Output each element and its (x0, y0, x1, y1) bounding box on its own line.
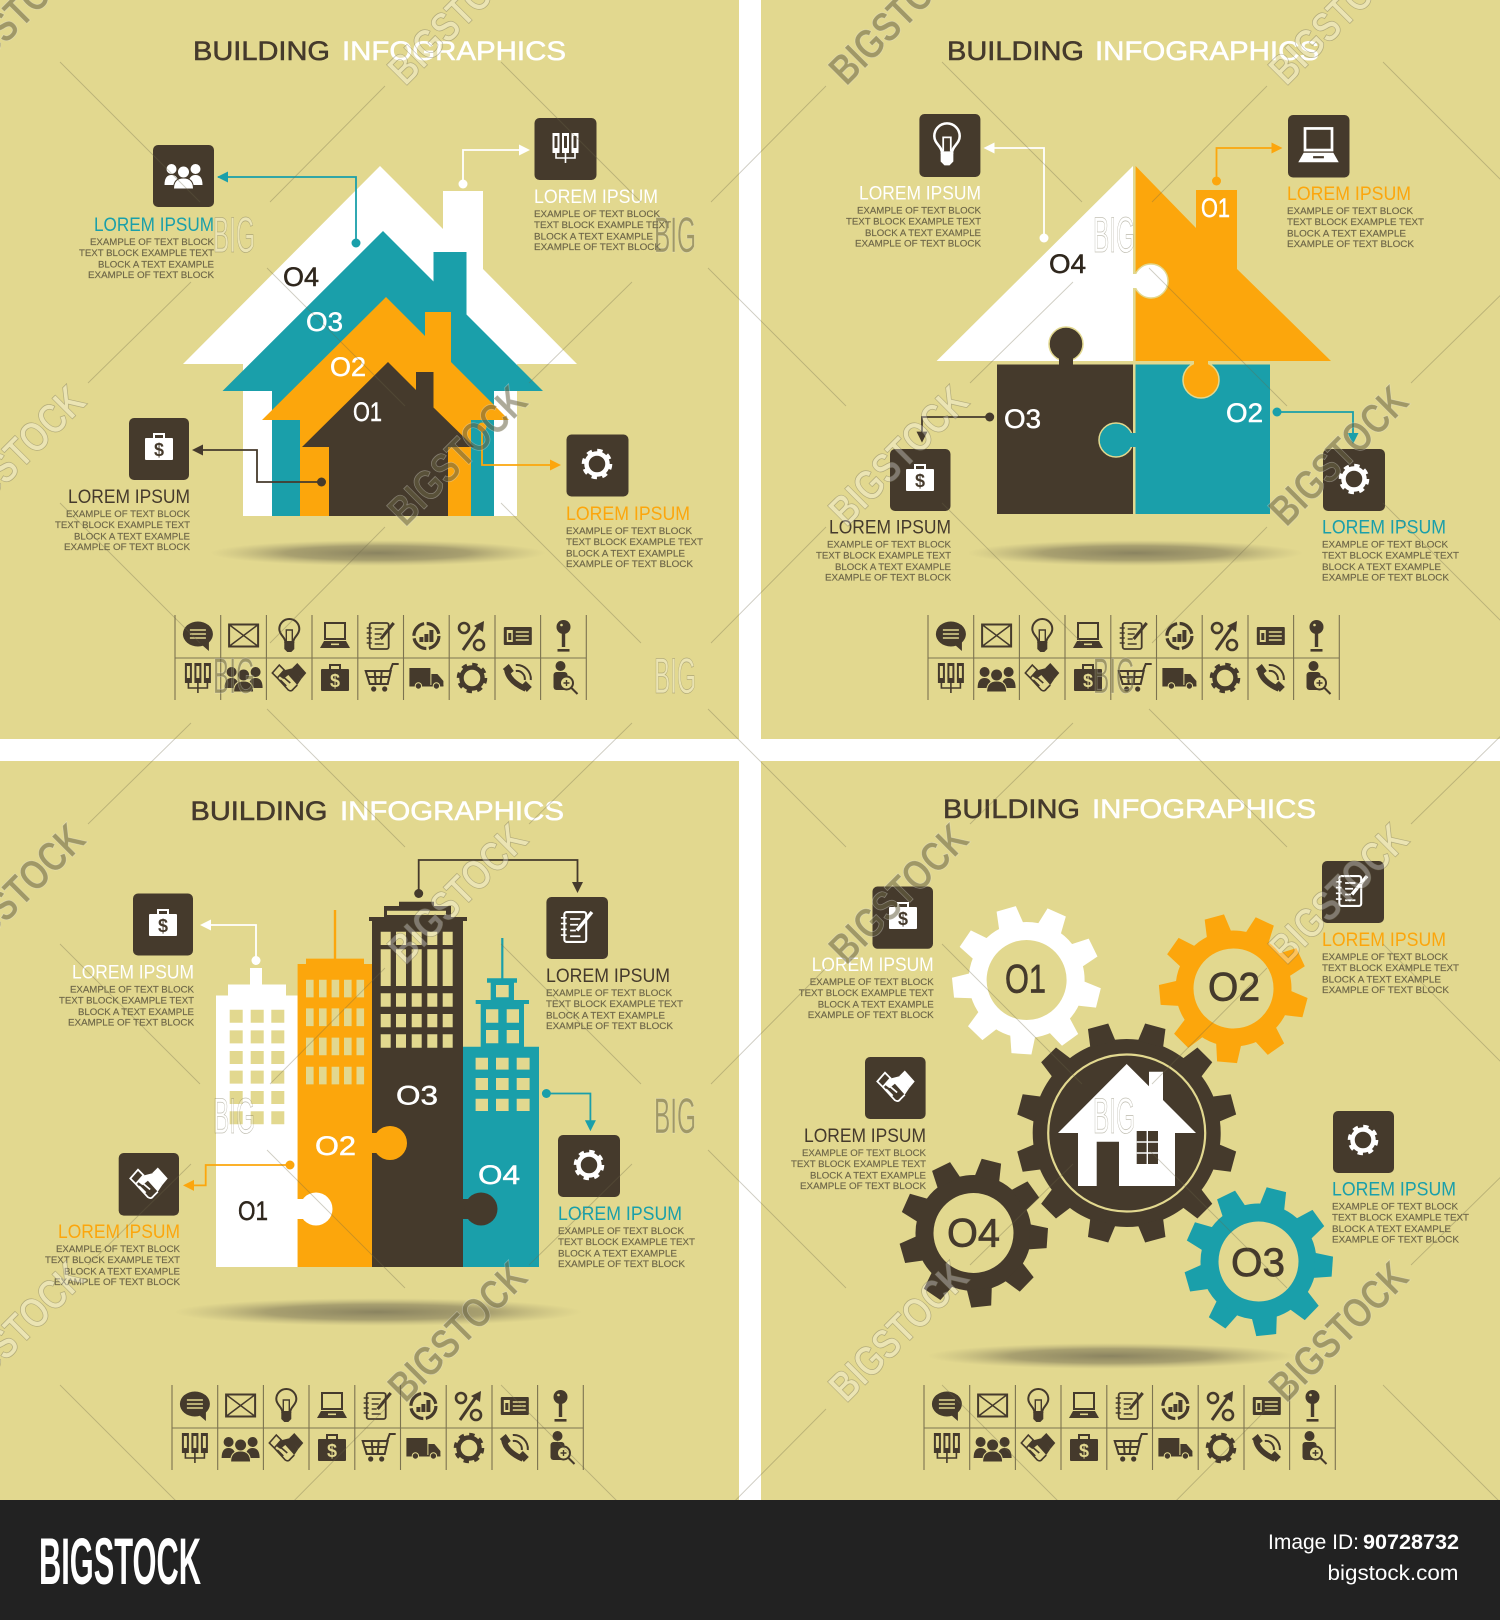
icon strip (172, 1385, 583, 1470)
watermark: BIGSTOCK diagonal stamps: BIGSTOCK (820, 377, 977, 534)
callout: gear: BLOCK A TEXT EXAMPLE (1332, 1224, 1451, 1235)
callout: notepad: EXAMPLE OF TEXT BLOCK (546, 1021, 674, 1032)
icon strip (924, 1385, 1335, 1470)
icon: briefcase (321, 665, 349, 691)
icon: pin (1310, 620, 1324, 652)
image id: 90728732 (1363, 1531, 1459, 1554)
icon: notepad (1120, 623, 1147, 649)
callout: gear (558, 1135, 695, 1270)
icon: gear (1212, 664, 1238, 692)
icon: id card (504, 627, 532, 645)
shadow (967, 540, 1303, 566)
callout: bulb (846, 114, 982, 250)
icon: gear (458, 664, 486, 692)
callout: briefcase: TEXT BLOCK EXAMPLE TEXT (816, 550, 951, 562)
callout: briefcase (55, 418, 191, 553)
watermark: BIGSTOCK diagonal stamps: BIGSTOCK (820, 1253, 977, 1410)
callout: gear (1322, 449, 1459, 584)
numbers: O4 (1049, 249, 1086, 279)
connector: brown (916, 412, 994, 443)
watermark: BIG stamps: BIG (654, 648, 696, 704)
numbers: O2 (315, 1131, 356, 1161)
white house layer (183, 166, 577, 516)
callout: gear: LOREM IPSUM (566, 504, 690, 525)
icon: handshake (269, 1433, 303, 1461)
icon: chart dial (1163, 1394, 1188, 1418)
connector: brown (414, 860, 583, 898)
callout: binders: BLOCK A TEXT EXAMPLE (534, 232, 653, 242)
callout: team: TEXT BLOCK EXAMPLE TEXT (79, 248, 214, 259)
gear: orange 02: O2 (1208, 966, 1260, 1010)
title (943, 794, 1316, 824)
icon: laptop (317, 1393, 347, 1418)
callout: team: EXAMPLE OF TEXT BLOCK (90, 237, 215, 248)
icon: percent (1212, 621, 1237, 650)
callout: binders (534, 118, 671, 253)
callout: briefcase: EXAMPLE OF TEXT BLOCK (827, 540, 952, 550)
callout: briefcase: LOREM IPSUM (68, 487, 190, 508)
watermark: BIG stamps: BIG (213, 207, 255, 263)
connector: teal (542, 1089, 596, 1131)
callout: team: LOREM IPSUM (94, 215, 214, 236)
callout: briefcase: LOREM IPSUM (72, 963, 194, 984)
icon: laptop (320, 623, 350, 648)
callout: laptop: BLOCK A TEXT EXAMPLE (1287, 228, 1406, 240)
callout: notepad: BLOCK A TEXT EXAMPLE (546, 1010, 665, 1022)
icon: truck (1162, 668, 1196, 689)
callout: handshake (45, 1153, 181, 1288)
panel: puzzle house (761, 0, 1500, 739)
watermark: BIGSTOCK diagonal stamps: BIGSTOCK (379, 815, 536, 972)
connector: brown (192, 444, 326, 486)
callout: handshake: TEXT BLOCK EXAMPLE TEXT (791, 1159, 926, 1170)
icon: percent (459, 621, 484, 650)
icon: team (974, 1437, 1012, 1462)
callout: handshake: EXAMPLE OF TEXT BLOCK (54, 1277, 181, 1288)
panel: gears (761, 761, 1500, 1500)
watermark: BIGSTOCK diagonal stamps: BIGSTOCK (1260, 1253, 1417, 1410)
icon: light bulb (276, 1389, 296, 1422)
callout: gear: BLOCK A TEXT EXAMPLE (558, 1248, 677, 1260)
icon: chart dial (414, 624, 439, 648)
icon: pin (556, 620, 570, 652)
shadow (927, 1343, 1295, 1369)
puzzle tab: white (1132, 264, 1168, 298)
icon: person search (550, 1431, 574, 1464)
icon: laptop (1069, 1393, 1099, 1418)
building: white (216, 968, 298, 1267)
title: INFOGRAPHICS (1095, 36, 1319, 66)
icon: notepad (367, 623, 394, 649)
gear: central with house (991, 998, 1262, 1268)
icon: briefcase (1070, 1435, 1098, 1461)
numbers: O3 (396, 1080, 438, 1110)
icon: id card (1257, 627, 1285, 645)
icon: chart dial (411, 1394, 436, 1418)
callout: laptop: EXAMPLE OF TEXT BLOCK (1287, 206, 1414, 217)
callout: handshake: LOREM IPSUM (804, 1126, 926, 1147)
icon strip (175, 615, 586, 700)
connector: white (458, 144, 530, 188)
callout: notepad: EXAMPLE OF TEXT BLOCK (1322, 952, 1449, 963)
icon: briefcase (1074, 665, 1102, 691)
panel: city skyline (0, 761, 739, 1500)
icon: truck (409, 668, 443, 689)
gear: white 01 (934, 888, 1119, 1072)
icon: binders (182, 1433, 208, 1463)
numbers (1004, 193, 1263, 434)
gear: teal 03 (1168, 1172, 1349, 1351)
connector: orange (1212, 142, 1282, 186)
panel: layered house (0, 0, 739, 739)
callout: laptop: LOREM IPSUM (1287, 184, 1411, 205)
callout: notepad: LOREM IPSUM (1322, 930, 1446, 951)
connector: white (200, 920, 260, 965)
icon: light bulb (1028, 1389, 1048, 1422)
callout: briefcase: LOREM IPSUM (812, 955, 934, 976)
callout: gear: TEXT BLOCK EXAMPLE TEXT (566, 537, 703, 548)
connector: white (984, 142, 1048, 242)
icon: speech bubble (932, 1392, 962, 1421)
callout: gear: TEXT BLOCK EXAMPLE TEXT (1322, 550, 1459, 562)
icon: light bulb (279, 619, 299, 652)
icon: pin (1306, 1390, 1320, 1422)
icon: phone (503, 664, 532, 692)
callout: gear: EXAMPLE OF TEXT BLOCK (1322, 572, 1450, 584)
callout: gear: EXAMPLE OF TEXT BLOCK (1332, 1202, 1459, 1213)
title: INFOGRAPHICS (340, 796, 564, 826)
callout: handshake: BLOCK A TEXT EXAMPLE (64, 1266, 180, 1278)
numbers: O1 (1201, 193, 1230, 223)
icon: briefcase (318, 1435, 346, 1461)
icon: percent (1208, 1391, 1233, 1420)
callout: gear: EXAMPLE OF TEXT BLOCK (1332, 1235, 1460, 1246)
icon: speech bubble (936, 622, 966, 651)
callout: bulb: EXAMPLE OF TEXT BLOCK (855, 238, 982, 250)
numbers: O3 (306, 307, 343, 337)
icon: phone (1252, 1434, 1281, 1462)
watermark: BIGSTOCK diagonal stamps: BIGSTOCK (379, 1253, 536, 1410)
numbers: O1 (238, 1196, 268, 1226)
shadow (174, 1298, 582, 1326)
title: BUILDING (193, 36, 330, 66)
puzzle tab: white (296, 1192, 332, 1226)
icon: envelope (982, 624, 1011, 646)
title (947, 36, 1319, 66)
icon: team (225, 667, 263, 692)
callout: gear: LOREM IPSUM (558, 1204, 682, 1225)
title: BUILDING (947, 36, 1084, 66)
puzzle piece: teal wall (1099, 364, 1270, 514)
callout: briefcase (59, 894, 195, 1029)
icon: truck (406, 1438, 440, 1459)
watermark: BIGSTOCK diagonal stamps: BIGSTOCK (1260, 815, 1417, 972)
callout: bulb: EXAMPLE OF TEXT BLOCK (857, 206, 982, 216)
callout: briefcase: EXAMPLE OF TEXT BLOCK (825, 572, 952, 584)
callout: briefcase: EXAMPLE OF TEXT BLOCK (808, 1010, 934, 1021)
gear: orange 02 (1142, 898, 1325, 1079)
orange house layer (262, 297, 509, 516)
icon: handshake (272, 663, 306, 691)
footer bar (0, 1500, 1500, 1620)
icon: pin (554, 1390, 568, 1422)
icon: handshake (1021, 1433, 1055, 1461)
connector: teal (217, 172, 360, 248)
icon: binders (934, 1433, 960, 1463)
callout: notepad (546, 897, 683, 1032)
watermark: BIG stamps (213, 207, 1135, 1144)
title (190, 796, 564, 826)
callout: binders: TEXT BLOCK EXAMPLE TEXT (534, 220, 671, 231)
callout: briefcase: TEXT BLOCK EXAMPLE TEXT (55, 520, 190, 531)
numbers: O3 (1004, 404, 1041, 434)
icon: phone (1256, 664, 1285, 692)
callout: notepad: TEXT BLOCK EXAMPLE TEXT (1322, 963, 1459, 974)
icon: id card (1253, 1397, 1281, 1415)
callout: bulb: TEXT BLOCK EXAMPLE TEXT (846, 216, 981, 228)
callout: briefcase: BLOCK A TEXT EXAMPLE (78, 1007, 194, 1018)
icon: cart (1115, 1434, 1148, 1462)
icon: handshake (1025, 663, 1059, 691)
text: BIG (1093, 1088, 1135, 1144)
numbers: O1 (353, 397, 382, 427)
callout: gear: EXAMPLE OF TEXT BLOCK (566, 526, 693, 537)
icon: chart dial (1167, 624, 1192, 648)
callout: briefcase: EXAMPLE OF TEXT BLOCK (64, 542, 191, 553)
callout: gear (566, 434, 703, 570)
callout: gear: TEXT BLOCK EXAMPLE TEXT (558, 1237, 695, 1248)
icon: percent (456, 1391, 481, 1420)
callout: laptop (1287, 115, 1424, 250)
connector: teal (1272, 408, 1358, 444)
icon: cart (363, 1434, 396, 1462)
building: teal (460, 938, 539, 1267)
connector: orange (478, 422, 561, 470)
numbers: O2 (330, 352, 366, 382)
watermark: BIG stamps: BIG (213, 648, 255, 704)
callout: handshake: BLOCK A TEXT EXAMPLE (810, 1170, 926, 1182)
callout: team: EXAMPLE OF TEXT BLOCK (88, 270, 215, 281)
text: BIG (1093, 207, 1135, 263)
icon: team (222, 1437, 260, 1462)
callout: notepad (1322, 861, 1459, 996)
building: brown (369, 902, 467, 1267)
callout: briefcase: EXAMPLE OF TEXT BLOCK (810, 977, 934, 988)
puzzle piece: orange roof (1136, 166, 1331, 361)
puzzle tab: orange (1183, 358, 1219, 398)
callout: laptop: TEXT BLOCK EXAMPLE TEXT (1287, 217, 1424, 228)
numbers: O2 (1226, 398, 1263, 428)
icon: envelope (226, 1394, 255, 1416)
brown house layer (302, 362, 474, 516)
icon: person search (1302, 1431, 1326, 1464)
site url: bigstock.com (1328, 1562, 1458, 1585)
callout: binders: EXAMPLE OF TEXT BLOCK (534, 209, 661, 220)
callout: binders: LOREM IPSUM (534, 187, 658, 208)
callout: handshake: EXAMPLE OF TEXT BLOCK (56, 1244, 181, 1255)
icon: id card (501, 1397, 529, 1415)
gear: white 01: O1 (1005, 958, 1046, 1002)
title: BUILDING (943, 794, 1080, 824)
icon: laptop (1073, 623, 1103, 648)
title (193, 36, 566, 66)
icon strip (928, 615, 1339, 700)
icon: person search (554, 661, 578, 694)
callout: briefcase: BLOCK A TEXT EXAMPLE (818, 1000, 934, 1010)
callout: briefcase (799, 886, 934, 1021)
callout: briefcase: EXAMPLE OF TEXT BLOCK (70, 985, 195, 996)
callout: handshake: TEXT BLOCK EXAMPLE TEXT (45, 1255, 180, 1266)
icon: envelope (978, 1394, 1007, 1416)
shadow (210, 540, 546, 566)
title: INFOGRAPHICS (342, 36, 566, 66)
icon: notepad (364, 1393, 391, 1419)
callout: handshake: LOREM IPSUM (58, 1222, 180, 1243)
icon: truck (1158, 1438, 1192, 1459)
icon: speech bubble (180, 1392, 210, 1421)
watermark: BIG stamps: BIG (654, 207, 696, 263)
connector: orange (183, 1160, 294, 1191)
gear: teal 03: O3 (1231, 1241, 1285, 1285)
watermark: BIGSTOCK diagonal stamps: BIGSTOCK (379, 377, 536, 534)
icon: cart (1119, 664, 1152, 692)
callout: gear: BLOCK A TEXT EXAMPLE (1322, 562, 1441, 573)
icon: team (978, 667, 1016, 692)
callout: laptop: EXAMPLE OF TEXT BLOCK (1287, 239, 1415, 250)
callout: bulb: BLOCK A TEXT EXAMPLE (865, 228, 981, 239)
teal house layer (222, 231, 543, 516)
callout: team (79, 145, 215, 281)
watermark: BIG stamps: BIG (213, 1088, 255, 1144)
icon: notepad (1116, 1393, 1143, 1419)
numbers: O4 (283, 262, 319, 292)
callout: handshake: EXAMPLE OF TEXT BLOCK (802, 1148, 927, 1159)
watermark: BIGSTOCK diagonal stamps: BIGSTOCK (820, 815, 977, 972)
callout: briefcase: BLOCK A TEXT EXAMPLE (74, 532, 190, 542)
callout: briefcase: BLOCK A TEXT EXAMPLE (835, 562, 951, 573)
text: BIG (1093, 648, 1135, 704)
callout: notepad: LOREM IPSUM (546, 966, 670, 987)
callout: binders: EXAMPLE OF TEXT BLOCK (534, 242, 662, 253)
callout: notepad: TEXT BLOCK EXAMPLE TEXT (546, 999, 683, 1010)
gear: brown 04 (883, 1143, 1064, 1323)
icon: phone (500, 1434, 529, 1462)
puzzle piece: white roof (937, 166, 1133, 361)
callout: notepad: EXAMPLE OF TEXT BLOCK (546, 988, 673, 999)
icon: speech bubble (183, 622, 213, 651)
callout: gear: EXAMPLE OF TEXT BLOCK (558, 1226, 685, 1237)
callout: briefcase: LOREM IPSUM (829, 518, 951, 538)
gear: brown 04: O4 (947, 1212, 1000, 1256)
numbers (283, 262, 382, 427)
footer bar: BIGSTOCK (39, 1524, 201, 1598)
callout: notepad: BLOCK A TEXT EXAMPLE (1322, 974, 1441, 986)
callout: bulb: LOREM IPSUM (859, 184, 981, 204)
icon: light bulb (1032, 619, 1052, 652)
icon: gear (456, 1434, 482, 1462)
callout: gear (1332, 1111, 1469, 1246)
icon: binders (938, 663, 964, 693)
callout: gear: EXAMPLE OF TEXT BLOCK (1322, 540, 1449, 550)
title: BUILDING (190, 796, 328, 826)
icon: binders (185, 663, 211, 693)
icon: envelope (229, 624, 258, 646)
callout: briefcase (816, 449, 952, 584)
image id (1268, 1531, 1459, 1554)
watermark: BIG stamps: BIG (654, 1088, 696, 1144)
image id: Image ID: (1268, 1531, 1359, 1554)
callout: gear: TEXT BLOCK EXAMPLE TEXT (1332, 1213, 1469, 1224)
numbers (238, 1080, 520, 1226)
callout: briefcase: TEXT BLOCK EXAMPLE TEXT (799, 988, 934, 999)
callout: gear: EXAMPLE OF TEXT BLOCK (566, 559, 694, 570)
title: INFOGRAPHICS (1092, 794, 1316, 824)
puzzle piece: brown wall (997, 327, 1133, 514)
callout: gear: EXAMPLE OF TEXT BLOCK (558, 1259, 686, 1270)
icon: gear (1208, 1434, 1234, 1462)
building: orange (298, 910, 372, 1267)
callout: team: BLOCK A TEXT EXAMPLE (98, 260, 214, 270)
callout: briefcase: TEXT BLOCK EXAMPLE TEXT (59, 996, 194, 1007)
callout: briefcase: EXAMPLE OF TEXT BLOCK (66, 509, 191, 520)
callout: handshake: EXAMPLE OF TEXT BLOCK (800, 1181, 927, 1192)
numbers: O4 (478, 1160, 520, 1190)
callout: gear: LOREM IPSUM (1332, 1180, 1456, 1201)
watermark: BIGSTOCK diagonal stamps: BIGSTOCK (1260, 377, 1417, 534)
callout: notepad: EXAMPLE OF TEXT BLOCK (1322, 985, 1450, 996)
icon: cart (366, 664, 399, 692)
icon: person search (1306, 661, 1330, 694)
callout: handshake (791, 1057, 927, 1192)
callout: briefcase: EXAMPLE OF TEXT BLOCK (68, 1018, 195, 1029)
callout: gear: BLOCK A TEXT EXAMPLE (566, 548, 685, 560)
callout: gear: LOREM IPSUM (1322, 518, 1446, 538)
